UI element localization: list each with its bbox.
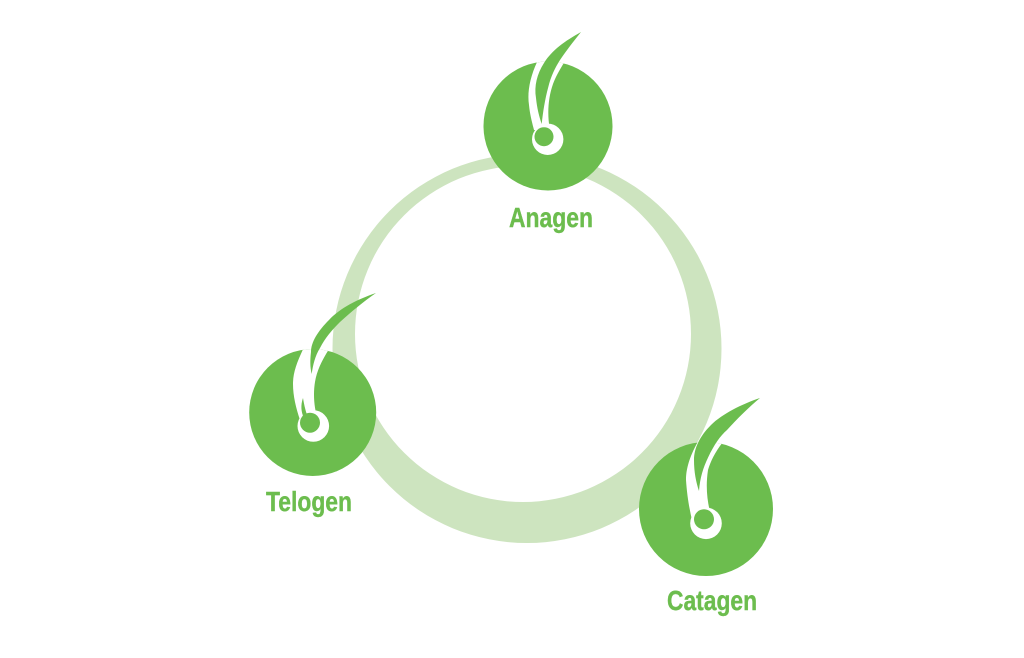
icon: Catagen bulb centre	[694, 509, 714, 529]
icon: Anagen hair shaft	[535, 32, 581, 124]
icon: Anagen white hair sheath	[528, 62, 564, 130]
icon: Telogen root sliver	[301, 398, 307, 418]
icon: Anagen follicle disc	[484, 62, 612, 190]
icon: Catagen hair bulb	[690, 508, 722, 539]
label: Telogen: Telogen	[266, 486, 352, 517]
icon: Telogen white hair sheath	[293, 349, 328, 418]
label: Anagen: Anagen	[509, 202, 593, 233]
icon: Telogen bulb centre	[300, 413, 320, 433]
cycle ring	[332, 154, 722, 543]
icon: Catagen hair shaft	[694, 398, 760, 491]
icon: Anagen bulb centre	[534, 127, 554, 146]
stage: Anagen	[484, 32, 612, 233]
stage: Catagen	[639, 398, 773, 616]
hair growth cycle diagram	[249, 32, 773, 616]
icon: Telogen hair bulb	[298, 410, 329, 442]
icon: Catagen follicle disc	[639, 442, 773, 576]
icon: Anagen hair bulb	[532, 124, 563, 155]
label: Catagen: Catagen	[667, 585, 757, 616]
icon: Catagen white hair sheath	[686, 442, 722, 518]
stage: Telogen	[249, 293, 376, 517]
icon: Telogen follicle disc	[249, 349, 376, 476]
icon: Telogen hair shaft	[310, 293, 376, 374]
